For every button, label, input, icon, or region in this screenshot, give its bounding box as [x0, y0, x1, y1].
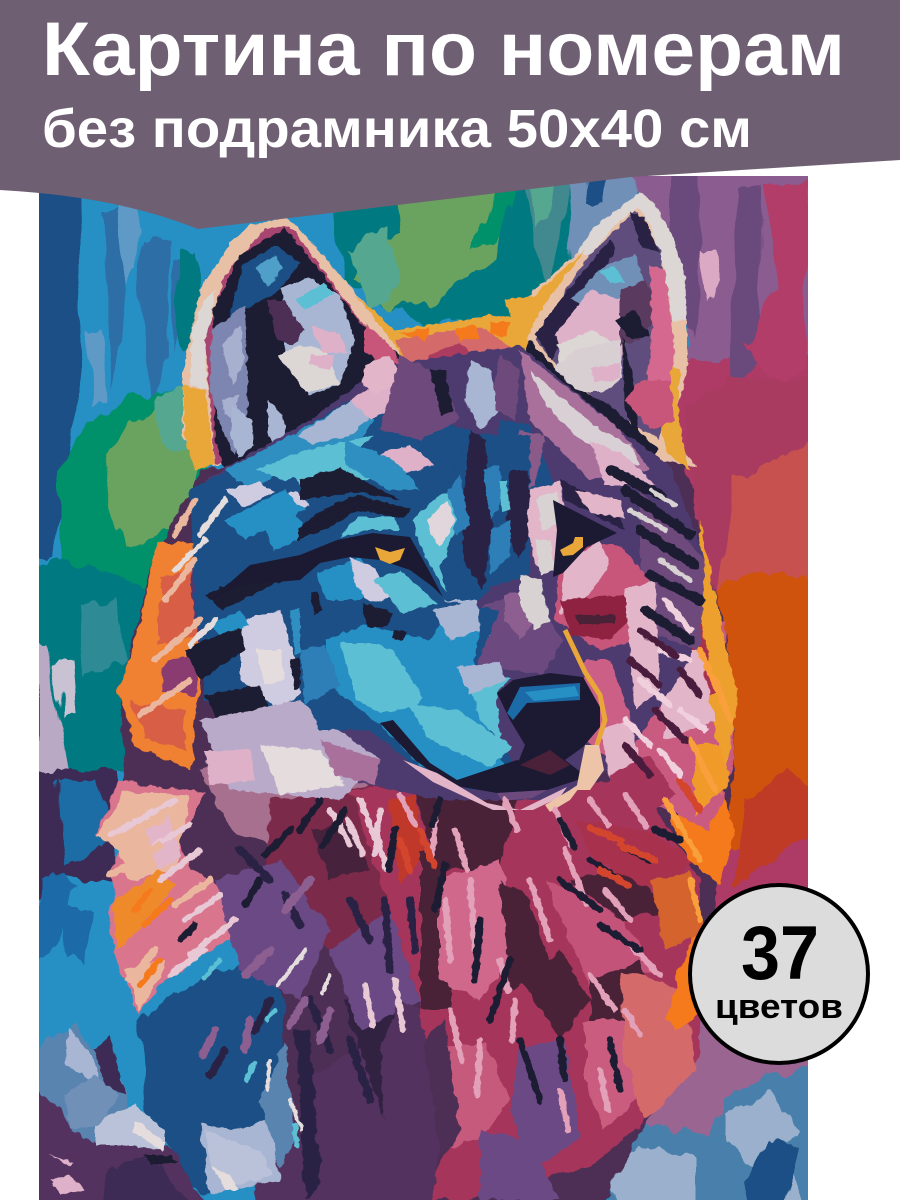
lower lip: [403, 760, 567, 810]
left cheek fur: [185, 565, 380, 800]
right eye: [553, 500, 617, 577]
wolf ruff and chest: [96, 430, 738, 1200]
badge label: цветов: [715, 988, 843, 1026]
painting background: [20, 160, 830, 1200]
right ear: [505, 193, 697, 470]
left ear: [183, 218, 407, 470]
badge number: 37: [741, 911, 819, 996]
nose and mouth: [380, 630, 605, 812]
blue muzzle and face: [300, 468, 520, 790]
subtitle: без подрамника 50х40 см: [42, 99, 752, 159]
head and forehead fur: [190, 345, 705, 825]
nose: [497, 673, 600, 777]
fur strokes: [110, 470, 730, 1145]
title: Картина по номерам: [42, 7, 845, 92]
badge circle: [690, 885, 868, 1063]
nose rim: [565, 630, 605, 765]
bottom left snow ridges: [50, 1028, 272, 1195]
mouth: [380, 720, 587, 793]
band of orange fur between the ears: [354, 296, 528, 362]
panel: wolf painting: [20, 160, 830, 1200]
header banner: [0, 0, 900, 229]
eyes: [210, 500, 617, 600]
badge: colour count: [690, 885, 868, 1063]
left eye: [210, 533, 443, 600]
